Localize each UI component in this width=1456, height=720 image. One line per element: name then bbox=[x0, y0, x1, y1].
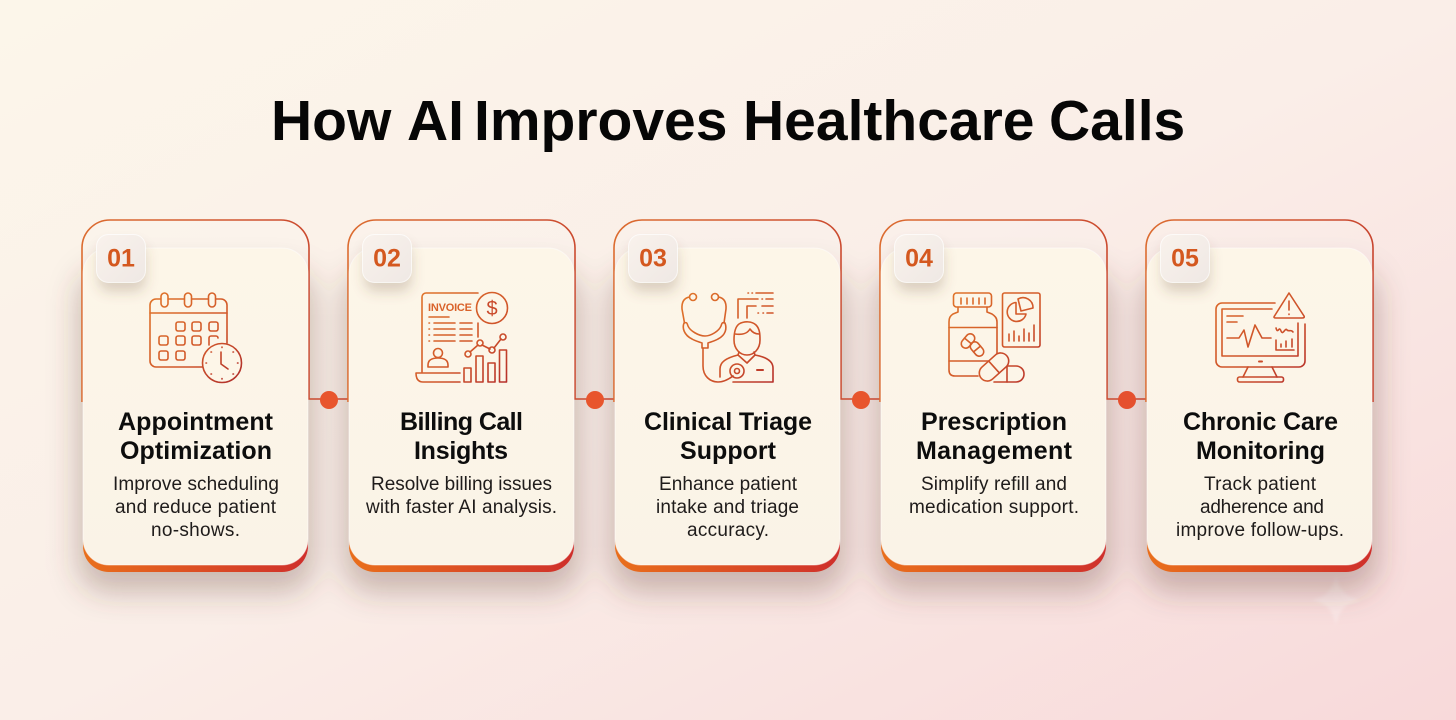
description: improve follow-ups. bbox=[1176, 520, 1344, 541]
description: with faster AI analysis. bbox=[365, 497, 557, 518]
heading bbox=[1183, 408, 1338, 465]
heading: Clinical Triage bbox=[644, 408, 812, 436]
icon: monitor with alert bbox=[1216, 293, 1305, 382]
heading: Support bbox=[680, 437, 777, 465]
heading bbox=[118, 408, 274, 465]
panel: card 3 clinical triage support bbox=[614, 220, 880, 572]
description: no-shows. bbox=[151, 520, 240, 541]
panel: card 4 prescription management bbox=[880, 220, 1146, 572]
description bbox=[656, 474, 799, 541]
description: Enhance patient bbox=[659, 474, 798, 495]
description bbox=[113, 474, 279, 541]
icon: calendar with clock bbox=[150, 293, 242, 382]
badge 05: 05 bbox=[1171, 244, 1199, 272]
icon: invoice with chart: $ bbox=[486, 298, 498, 320]
heading: Insights bbox=[414, 437, 508, 465]
connector dot 2 bbox=[586, 391, 604, 409]
heading bbox=[644, 408, 812, 465]
heading: Optimization bbox=[120, 437, 272, 465]
badge 01 bbox=[96, 234, 146, 282]
badge 02 bbox=[362, 234, 412, 282]
icon: sparkle bbox=[1312, 575, 1360, 625]
title: Calls bbox=[1049, 89, 1185, 153]
description bbox=[365, 474, 557, 518]
description: medication support. bbox=[909, 497, 1079, 518]
icon: invoice with chart: INVOICE bbox=[428, 302, 472, 314]
panel: card 2 billing call insights bbox=[348, 220, 614, 572]
icon: invoice with chart bbox=[416, 292, 508, 382]
heading: Prescription bbox=[921, 408, 1067, 436]
panel: card 1 appointment optimization bbox=[82, 220, 348, 572]
title bbox=[271, 89, 1185, 153]
description: Resolve billing issues bbox=[371, 474, 552, 495]
description bbox=[909, 474, 1079, 518]
connector dot 3 bbox=[852, 391, 870, 409]
description: Improve scheduling bbox=[113, 474, 279, 495]
badge 01: 01 bbox=[107, 244, 135, 272]
description: Simplify refill and bbox=[921, 474, 1067, 495]
title: Healthcare bbox=[743, 89, 1034, 153]
heading: Monitoring bbox=[1196, 437, 1325, 465]
badge 05 bbox=[1160, 234, 1210, 282]
description: intake and triage bbox=[656, 497, 799, 518]
panel: card 5 chronic care monitoring bbox=[1146, 220, 1373, 572]
badge 04: 04 bbox=[905, 244, 933, 272]
description: and reduce patient bbox=[115, 497, 277, 518]
heading: Billing Call bbox=[400, 408, 523, 436]
icon: pill bottle and report bbox=[949, 293, 1040, 384]
badge 03 bbox=[628, 234, 678, 282]
heading bbox=[916, 408, 1073, 465]
badge 02: 02 bbox=[373, 244, 401, 272]
title: How bbox=[271, 89, 392, 153]
connector dot 1 bbox=[320, 391, 338, 409]
badge 04 bbox=[894, 234, 944, 282]
title: AI bbox=[407, 89, 464, 153]
icon: stethoscope and doctor bbox=[682, 293, 773, 382]
heading bbox=[400, 408, 523, 465]
heading: Management bbox=[916, 437, 1073, 465]
description bbox=[1176, 474, 1344, 541]
description: accuracy. bbox=[687, 520, 769, 541]
description: adherence and bbox=[1200, 497, 1324, 518]
description: Track patient bbox=[1204, 474, 1317, 495]
title: Improves bbox=[474, 89, 727, 153]
badge 03: 03 bbox=[639, 244, 667, 272]
heading: Appointment bbox=[118, 408, 274, 436]
connector dot 4 bbox=[1118, 391, 1136, 409]
heading: Chronic Care bbox=[1183, 408, 1338, 436]
